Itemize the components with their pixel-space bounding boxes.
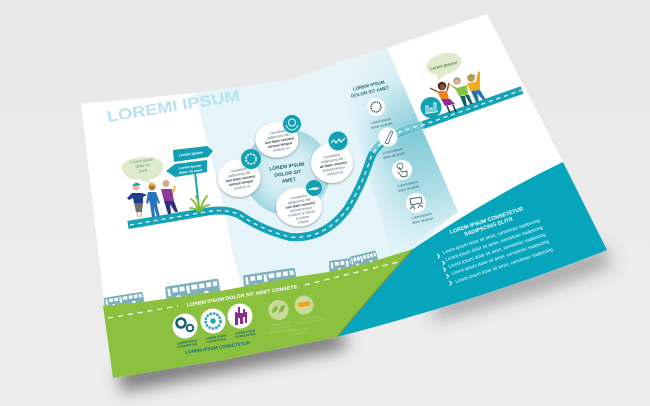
badge captions: CONSETETUR xyxy=(206,337,227,344)
circle: top: Consetetur xyxy=(269,128,287,135)
circle: right: eirmod tempor xyxy=(323,165,346,173)
circle: bottom: sed diam nonumy xyxy=(285,201,315,210)
circle: right: invidunt ut xyxy=(327,170,343,177)
circle: left xyxy=(218,149,261,197)
column item: touch: dolor sit amet xyxy=(398,184,420,193)
wedge heading: LOREM IPSUM CONSETETUR xyxy=(449,206,524,236)
wedge bullet list: Lorem ipsum dolor sit amet, consetetur sadipscing xyxy=(451,239,550,276)
circle: bottom: et dolore xyxy=(295,215,310,221)
bus: three xyxy=(242,268,297,293)
circle: left: sadipscing elitr, xyxy=(227,170,252,178)
green band subheading: LOREM IPSUM CONSETETUR xyxy=(185,340,251,355)
circle: top xyxy=(256,115,301,158)
signpost: Lorem ipsum xyxy=(178,164,201,170)
people group: right xyxy=(430,71,486,113)
column heading: LOREM IPSUM xyxy=(352,79,385,92)
circle: top: invidunt ut xyxy=(273,146,289,153)
hub heading: AMET xyxy=(281,177,296,185)
circle: right: Consetetur xyxy=(323,152,341,159)
circle: left: invidunt ut xyxy=(234,184,250,191)
icon: bar chart badge xyxy=(420,97,442,118)
column item: touch: Lorem ipsum xyxy=(397,180,418,188)
circle: bottom: invidunt ut labore xyxy=(288,209,315,218)
circle: bottom: sadipscing elitr, xyxy=(287,197,312,205)
speech bubble: left xyxy=(122,157,163,187)
column item: network xyxy=(367,98,393,130)
badge captions: CONSETETUR xyxy=(271,324,292,331)
badge captions: CONSETETUR xyxy=(177,342,198,349)
brochure drop shadow xyxy=(118,245,612,392)
column item: network: Lorem ipsum xyxy=(370,117,391,125)
badge captions: CONSETETUR SADIP xyxy=(296,317,325,326)
column item: meeting xyxy=(406,193,434,225)
bus: four rear xyxy=(328,256,373,275)
column item: meeting: Lorem ipsum xyxy=(411,212,432,220)
wedge bullet list: Lorem ipsum dolor sit amet, consetetur sadipscing xyxy=(442,218,541,255)
column item: meeting: dolor sit amet xyxy=(412,216,434,225)
wedge bullet list xyxy=(437,218,554,286)
icon badge: orange bus xyxy=(294,296,314,314)
circle: top: eirmod tempor xyxy=(268,141,293,149)
badge captions: LOREM IPSUM xyxy=(176,338,198,346)
green band heading: LOREM IPSUM DOLOR SIT AMET CONSETE xyxy=(186,284,299,308)
person: orange top xyxy=(430,82,456,113)
icon: hands xyxy=(283,115,301,133)
wedge bullet list: Lorem ipsum dolor sit amet, consetetur sadipscing xyxy=(445,225,544,262)
title: LOREMI IPSUM xyxy=(106,88,241,126)
circle: right: sadipscing elitr, xyxy=(320,156,345,164)
person: man in hard hat xyxy=(146,183,160,217)
badge captions: SADIPSCING ELITR xyxy=(268,327,296,335)
column heading: DOLOR SIT AMET xyxy=(350,85,390,99)
bus: one xyxy=(103,292,145,311)
column item: rocket xyxy=(378,128,405,160)
icon: grass xyxy=(190,196,209,211)
icon badge: purple figures xyxy=(228,304,252,328)
circle: bottom: Consetetur xyxy=(290,193,308,200)
icon: gear xyxy=(241,149,261,169)
column item: touch xyxy=(392,160,420,193)
speech bubble: left: amet xyxy=(138,167,149,173)
speech bubble: left: dolor sit xyxy=(135,162,151,169)
signpost xyxy=(166,146,213,208)
person: purple shirt xyxy=(161,180,178,214)
panel: white sheet xyxy=(81,14,607,378)
person: yellow top xyxy=(467,71,486,102)
signpost: dolor sit amet xyxy=(178,168,203,175)
road xyxy=(128,90,522,237)
hub circle xyxy=(244,129,330,215)
circle: bottom: magna xyxy=(298,219,309,225)
circle: top: sadipscing elitr, xyxy=(266,132,291,140)
badge captions: CONSETETUR xyxy=(288,330,309,337)
badge captions xyxy=(176,314,325,349)
column item: rocket: Lorem ipsum xyxy=(382,147,403,155)
person: woman in navy xyxy=(127,183,147,217)
wedge bullet list: Lorem ipsum dolor sit amet, consetetur sadipscing xyxy=(455,247,554,284)
panel: gradient column xyxy=(335,48,458,258)
speech bubble: right xyxy=(424,49,464,81)
speech bubble: right: Lorem Ipsum! xyxy=(430,60,458,71)
badge captions: LOREM IPSUM xyxy=(205,333,227,341)
signpost: Lorem Ipsum xyxy=(179,150,204,157)
circle: bottom: eirmod tempor xyxy=(290,205,313,213)
column item: network: dolor sit amet xyxy=(371,121,393,130)
icon: hand xyxy=(306,180,322,196)
panel: pale blue column xyxy=(195,48,458,290)
badge captions: LOREM IPSUM xyxy=(234,328,256,336)
hub heading: DOLOR SIT xyxy=(274,169,302,179)
icon badge: gears xyxy=(172,314,198,338)
wedge bullet list: Lorem ipsum dolor sit amet, consetetur sadipscing xyxy=(448,232,547,269)
bus: four front xyxy=(349,250,379,271)
icon badge: target xyxy=(200,308,226,334)
icon badge: leaf xyxy=(268,300,288,320)
speech bubble: left: Lorem ipsum xyxy=(130,157,154,164)
circle: left: eirmod tempor xyxy=(229,179,254,187)
badge captions: CONSETETUR xyxy=(271,320,291,328)
icon: wave xyxy=(328,132,348,150)
circle: bottom xyxy=(276,180,322,226)
hub heading: LOREM IPSUM xyxy=(269,162,305,172)
people group: left xyxy=(127,180,178,217)
circle: left: sed diam nonumy xyxy=(225,174,255,183)
panel: green band xyxy=(103,249,413,378)
circle: top: sed diam nonumy xyxy=(264,136,294,145)
badge captions: CONSETETUR xyxy=(300,314,320,322)
circle: right: ad diam nonumy xyxy=(319,160,347,169)
wedge heading: SADIPSCING ELITR xyxy=(464,217,514,238)
circle: right xyxy=(311,132,353,183)
circle: left: Consetetur xyxy=(230,166,248,173)
person: green top xyxy=(448,77,473,106)
badge captions: LOREM IPSUM xyxy=(288,326,309,334)
bus: two xyxy=(164,278,221,305)
badge captions: CONSETETUR xyxy=(235,332,256,339)
column item: rocket: dolor sit amet xyxy=(383,151,405,160)
brochure xyxy=(81,14,607,378)
panel: teal wedge xyxy=(337,162,607,337)
